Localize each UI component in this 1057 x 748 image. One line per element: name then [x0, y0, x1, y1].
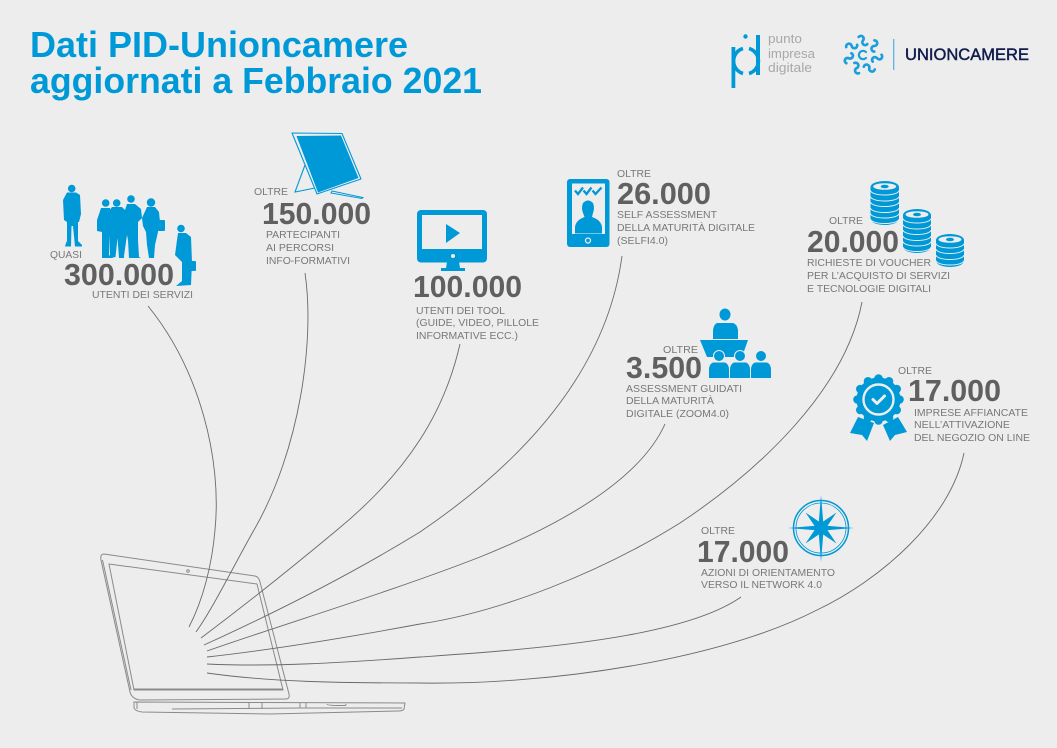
panel: 100.000 utenti dei tool: UTENTI DEI TOOL	[416, 306, 505, 317]
panel: 150.000 partecipanti: INFO-FORMATIVI	[266, 256, 350, 267]
panel: 20.000 richieste di voucher: OLTRE	[829, 216, 863, 227]
panel: 17.000 imprese affiancate: DEL NEGOZIO ON LINE	[914, 433, 1030, 444]
panel: 300.000 utenti dei servizi: 300.000	[64, 258, 174, 292]
panel: 100.000 utenti dei tool: 100.000	[413, 270, 522, 304]
panel: 20.000 richieste di voucher: E TECNOLOGIE DIGITALI	[807, 284, 931, 295]
panel: 17.000 azioni di orientamento: AZIONI DI ORIENTAMENTO	[701, 568, 835, 579]
panel: 100.000 utenti dei tool	[413, 210, 539, 342]
panel: 300.000 utenti dei servizi	[50, 185, 196, 301]
panel: 300.000 utenti dei servizi: UTENTI DEI SERVIZI	[92, 290, 193, 301]
logo: punto impresa digitale: punto	[768, 31, 802, 46]
icon: compass rose	[788, 495, 854, 562]
panel: 17.000 azioni di orientamento: OLTRE	[701, 526, 735, 537]
icon: tablet with stand and pen	[292, 133, 363, 198]
icon: coin stacks	[870, 181, 964, 267]
panel: 26.000 self assessment	[567, 169, 755, 247]
panel: 17.000 azioni di orientamento	[697, 495, 854, 591]
connector lines	[148, 256, 964, 683]
icon: smartphone with user and checks	[567, 179, 610, 247]
panel: 17.000 imprese affiancate: 17.000	[908, 374, 1001, 408]
icon: monitor with play button	[417, 210, 487, 271]
panel: 26.000 self assessment: 26.000	[617, 177, 711, 211]
icon: laptop	[101, 554, 405, 714]
panel: 20.000 richieste di voucher: PER L’ACQUISTO DI SERVIZI	[807, 271, 950, 282]
logo: Unioncamere: UNIONCAMERE	[905, 46, 1029, 64]
panel: 17.000 imprese affiancate	[850, 366, 1030, 444]
panel: 150.000 partecipanti	[254, 133, 371, 267]
title: Dati PID-Unioncamere	[30, 24, 408, 65]
panel: 17.000 imprese affiancate: IMPRESE AFFIANCATE	[914, 408, 1028, 419]
panel: 26.000 self assessment: SELF ASSESSMENT	[617, 210, 718, 221]
panel: 17.000 imprese affiancate: NELL’ATTIVAZIONE	[914, 420, 1010, 431]
icon: speaker at podium with audience	[700, 308, 771, 378]
panel: 26.000 self assessment: (SELFI4.0)	[617, 236, 668, 247]
panel: 150.000 partecipanti: AI PERCORSI	[266, 243, 334, 254]
icon: people silhouettes	[63, 185, 196, 286]
panel: 100.000 utenti dei tool: (GUIDE, VIDEO, PILLOLE	[416, 318, 539, 329]
panel: 20.000 richieste di voucher: RICHIESTE DI VOUCHER	[807, 258, 931, 269]
panel: 3.500 assessment guidati: 3.500	[626, 351, 702, 385]
logo: Unioncamere	[844, 35, 1029, 74]
panel: 17.000 azioni di orientamento: 17.000	[697, 535, 789, 569]
title	[30, 24, 482, 101]
logo: punto impresa digitale	[732, 31, 816, 88]
logo: punto impresa digitale: impresa	[768, 46, 816, 61]
panel: 3.500 assessment guidati: DELLA MATURITÀ	[626, 394, 714, 407]
panel: 3.500 assessment guidati	[626, 308, 771, 420]
panel: 150.000 partecipanti: 150.000	[262, 197, 371, 231]
panel: 300.000 utenti dei servizi: QUASI	[50, 250, 82, 261]
panel: 20.000 richieste di voucher	[807, 181, 964, 295]
panel: 150.000 partecipanti: OLTRE	[254, 187, 288, 198]
panel: 20.000 richieste di voucher: 20.000	[807, 225, 899, 259]
icon: award rosette	[850, 374, 907, 441]
panel: 3.500 assessment guidati: ASSESSMENT GUIDATI	[626, 384, 742, 395]
panel: 3.500 assessment guidati: DIGITALE (ZOOM4.0)	[626, 409, 729, 420]
panel: 17.000 azioni di orientamento: VERSO IL NETWORK 4.0	[701, 580, 822, 591]
panel: 26.000 self assessment: OLTRE	[617, 169, 651, 180]
panel: 26.000 self assessment: DELLA MATURITÀ DIGITALE	[617, 221, 755, 234]
panel: 17.000 imprese affiancate: OLTRE	[898, 366, 932, 377]
title: aggiornati a Febbraio 2021	[30, 60, 482, 101]
panel: 100.000 utenti dei tool: INFORMATIVE ECC.)	[416, 331, 518, 342]
logo: punto impresa digitale: digitale	[768, 60, 812, 75]
panel: 150.000 partecipanti: PARTECIPANTI	[266, 230, 340, 241]
panel: 3.500 assessment guidati: OLTRE	[663, 345, 698, 356]
